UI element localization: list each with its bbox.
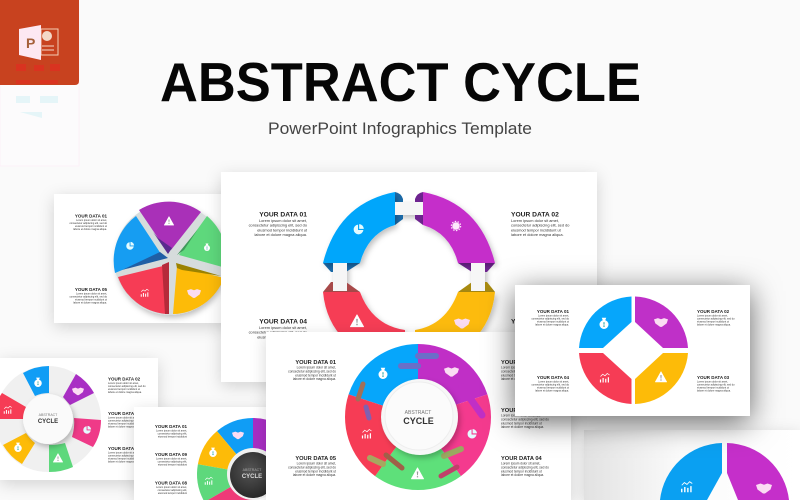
- text: data 02: [501, 360, 549, 381]
- half ring chart: [660, 443, 789, 500]
- text: data 02: eiusmod tempor incididunt ut: [108, 388, 140, 391]
- text block: data 04: consectetur adipiscing elit, sed do: [249, 330, 307, 335]
- text: data 02: labore et dolore magna aliqua.: [697, 324, 731, 326]
- text: data 03: eiusmod tempor incididunt ut: [697, 386, 729, 390]
- PowerPoint badge: [0, 0, 79, 166]
- text: data 01: eiusmod tempor incididunt ut: [295, 373, 336, 377]
- text: data 01: labore et dolore magna aliqua.: [535, 324, 569, 326]
- text: data 02: Lorem ipsum dolor sit amet,: [697, 314, 728, 318]
- panel: pie slide: [54, 194, 234, 323]
- text: data 01: YOUR DATA 01: [537, 309, 569, 314]
- text block: data 05: eiusmod tempor incididunt ut: [75, 298, 107, 302]
- icon: chart: [4, 406, 12, 414]
- center label: [38, 413, 58, 425]
- text: data 01: eiusmod tempor incididunt ut: [537, 320, 569, 324]
- text block: data 02: labore et dolore magna aliqua.: [511, 232, 564, 237]
- panel: center donut slide: [266, 332, 571, 500]
- text block: data 01: YOUR DATA 01: [75, 214, 107, 218]
- text block: data 01: YOUR DATA 01: [259, 212, 307, 218]
- text: data 02: Lorem ipsum dolor sit amet,: [501, 366, 540, 370]
- text block: data 05: YOUR DATA 05: [75, 287, 107, 292]
- panel: dark center slide: [134, 407, 301, 500]
- icon: money bag: [378, 368, 388, 379]
- text: data 01: [155, 424, 187, 438]
- text: data 09: Lorem ipsum dolor sit amet,: [156, 458, 187, 460]
- text: data 08: [155, 480, 187, 495]
- text block: data 04: Lorem ipsum dolor sit amet,: [259, 325, 307, 330]
- text block: data 02: YOUR DATA 02: [511, 212, 559, 218]
- icon: warning: [655, 372, 667, 382]
- text: data 03: Lorem ipsum dolor sit amet,: [697, 380, 728, 384]
- text block: data 01: labore et dolore magna aliqua.: [254, 232, 307, 237]
- text: data 04: [501, 456, 549, 477]
- text: data 04: YOUR DATA 04: [501, 456, 542, 462]
- center label: ABSTRACT: [405, 410, 431, 416]
- text: data 04: eiusmod tempor incididunt ut: [537, 386, 569, 390]
- icon: clock: [126, 242, 134, 250]
- text block: data 02: eiusmod tempor incididunt ut: [511, 227, 562, 232]
- text: data 09: [155, 452, 187, 466]
- text: data 04: consectetur adipiscing elit, sed do: [531, 384, 570, 386]
- pie chart: [114, 202, 227, 315]
- text: data 09: eiusmod tempor incididunt: [158, 464, 187, 466]
- center label: CYCLE: [38, 419, 58, 425]
- icon: clock: [468, 429, 477, 438]
- icon: handshake: [187, 289, 201, 298]
- icon: person: [209, 448, 217, 457]
- icon: clock: [354, 224, 364, 234]
- icon: handshake: [756, 484, 772, 494]
- text block: data 01: eiusmod tempor incididunt ut: [75, 225, 107, 228]
- text: data 05: eiusmod tempor incididunt ut: [295, 469, 336, 473]
- text: data 04: labore et dolore magna aliqua.: [108, 460, 142, 464]
- text block: data 01: eiusmod tempor incididunt ut: [257, 227, 308, 232]
- text block: data 05: [69, 287, 108, 304]
- text: data 03: Lorem ipsum dolor sit amet,: [108, 416, 139, 420]
- text: data 01: YOUR DATA 01: [295, 360, 336, 366]
- center label: CYCLE: [242, 474, 262, 480]
- text: data 09: consectetur adipiscing elit,: [158, 460, 187, 464]
- text: data 03: labore et dolore magna aliqua.: [108, 426, 142, 428]
- dark wheel chart: [197, 418, 301, 500]
- text: data 01: consectetur adipiscing elit, sed do: [288, 369, 336, 373]
- text: data 03: [501, 408, 549, 429]
- text: data 05: consectetur adipiscing elit, sed do: [288, 465, 336, 469]
- text: data 04: [108, 446, 146, 464]
- center label: CYCLE: [403, 416, 434, 426]
- text: data 08: Lorem ipsum dolor sit amet,: [156, 486, 187, 489]
- text: data 03: eiusmod tempor incididunt ut: [108, 422, 140, 426]
- text: data 01: Lorem ipsum dolor sit amet,: [156, 430, 187, 432]
- text: data 03: labore et dolore magna aliqua.: [501, 425, 544, 429]
- text block: data 01: consectetur adipiscing elit, sed do: [69, 222, 108, 225]
- text: data 03: consectetur adipiscing elit, sed do: [697, 384, 735, 386]
- panel: two-tone slide: [584, 430, 800, 500]
- text block: data 04: YOUR DATA 04: [259, 318, 307, 326]
- icon: chart: [362, 430, 372, 438]
- icon: warning: [411, 468, 424, 479]
- panel: ring slide: [221, 172, 597, 382]
- text: data 01: Lorem ipsum dolor sit amet,: [538, 314, 569, 318]
- text: data 02: YOUR DATA 02: [697, 309, 730, 314]
- text: data 01: Lorem ipsum dolor sit amet,: [297, 366, 336, 370]
- icon: chart: [600, 374, 610, 382]
- icon: person: [14, 443, 22, 452]
- text: data 04: Lorem ipsum dolor sit amet,: [538, 380, 569, 384]
- icon: handshake: [72, 388, 84, 395]
- text: data 03: [108, 411, 146, 428]
- text: data 02: eiusmod tempor incididunt ut: [697, 320, 729, 324]
- text: data 04: consectetur adipiscing elit, sed do: [108, 454, 146, 458]
- text: data 02: eiusmod tempor incididunt ut: [501, 373, 542, 377]
- text: data 02: labore et dolore magna aliqua.: [501, 377, 544, 381]
- subtitle: PowerPoint Infographics Template: [268, 119, 532, 138]
- panel: diamond ring slide: [515, 285, 750, 416]
- center label: ABSTRACT: [243, 468, 262, 472]
- text: data 04: labore et dolore magna aliqua.: [535, 390, 569, 392]
- text: data 04: YOUR DATA 04: [537, 375, 569, 380]
- text block: data 01: [249, 212, 308, 237]
- text: data 05: [288, 456, 336, 477]
- icon: handshake: [232, 432, 244, 439]
- text block: data 03: YOUR DATA 03: [511, 318, 559, 326]
- icon: money bag: [34, 378, 42, 387]
- text: data 02: Lorem ipsum dolor sit amet,: [108, 382, 139, 385]
- text: data 04: Lorem ipsum dolor sit amet,: [501, 462, 540, 466]
- icon: handshake: [654, 318, 668, 327]
- icon: chart: [682, 482, 692, 492]
- text: data 02: YOUR DATA 02: [108, 376, 141, 382]
- text: data 05: Lorem ipsum dolor sit amet,: [297, 462, 336, 466]
- panel: wheel slide: [0, 358, 158, 480]
- text: data 01: [288, 360, 336, 381]
- text: data 03: consectetur adipiscing elit, sed do: [501, 417, 549, 421]
- ring chart: [323, 192, 495, 340]
- icon: money bag: [600, 318, 608, 329]
- text block: data 01: Lorem ipsum dolor sit amet,: [76, 219, 107, 222]
- text: data 04: Lorem ipsum dolor sit amet,: [108, 452, 139, 454]
- text: data 02: [108, 376, 146, 394]
- text: data 03: eiusmod tempor incididunt ut: [501, 421, 542, 425]
- text: data 03: consectetur adipiscing elit, sed do: [108, 420, 146, 422]
- icon: handshake: [454, 318, 470, 328]
- text: data 04: consectetur adipiscing elit, sed do: [501, 465, 549, 469]
- text: data 04: YOUR DATA 04: [108, 446, 141, 451]
- text block: data 04: [249, 318, 308, 339]
- text: data 02: consectetur adipiscing elit, sed do: [501, 369, 549, 373]
- text block: data 02: [511, 212, 569, 237]
- text: data 04: [531, 375, 570, 392]
- text: data 08: YOUR DATA 08: [155, 480, 187, 486]
- text: data 03: [697, 375, 735, 392]
- text: data 03: YOUR DATA 03: [108, 411, 141, 416]
- text: data 02: labore et dolore magna aliqua.: [108, 391, 142, 394]
- text block: data 05: consectetur adipiscing elit, sed do: [69, 296, 108, 298]
- text: data 03: YOUR DATA 03: [501, 408, 542, 414]
- text block: data 01: consectetur adipiscing elit, sed do: [249, 223, 307, 228]
- PowerPoint badge: P: [26, 35, 35, 51]
- icon: money bag: [204, 244, 210, 251]
- text: data 01: [531, 309, 570, 326]
- center label: [403, 410, 434, 426]
- text: data 03: Lorem ipsum dolor sit amet,: [501, 414, 540, 418]
- text: data 05: labore et dolore magna aliqua.: [293, 473, 336, 477]
- text: data 01: YOUR DATA 01: [155, 424, 187, 429]
- donut chart: [345, 344, 491, 490]
- icon: handshake: [444, 367, 459, 377]
- text: data 01: consectetur adipiscing elit,: [158, 432, 187, 436]
- text: data 08: eiusmod tempor incididunt: [158, 492, 187, 495]
- title: ABSTRACT CYCLE: [160, 51, 641, 113]
- text block: data 05: Lorem ipsum dolor sit amet,: [76, 292, 107, 296]
- text block: data 04: eiusmod tempor incididunt ut: [257, 334, 308, 339]
- icon: chart: [205, 477, 213, 485]
- text: data 04: eiusmod tempor incididunt ut: [108, 458, 140, 460]
- text: data 05: YOUR DATA 05: [295, 456, 336, 462]
- text block: data 01: [69, 214, 108, 231]
- icon: warning: [164, 217, 174, 225]
- icon: warning: [53, 454, 63, 462]
- text: data 02: [697, 309, 735, 326]
- text block: data 02: consectetur adipiscing elit, sed do: [511, 223, 569, 228]
- text: data 09: YOUR DATA 09: [155, 452, 187, 457]
- text: data 02: consectetur adipiscing elit, sed do: [697, 318, 735, 320]
- text: data 01: labore et dolore magna aliqua.: [293, 377, 336, 381]
- text block: data 01: Lorem ipsum dolor sit amet,: [259, 218, 307, 223]
- icon: clock: [83, 426, 91, 434]
- text: data 08: consectetur adipiscing elit,: [158, 489, 187, 492]
- icon: gear: [451, 221, 461, 231]
- center label: ABSTRACT: [39, 413, 58, 417]
- diamond ring chart: [579, 296, 688, 404]
- wheel chart: [0, 366, 101, 472]
- text: data 01: consectetur adipiscing elit, sed do: [531, 318, 570, 320]
- text: data 02: YOUR DATA 02: [501, 360, 542, 366]
- text block: data 01: labore et dolore magna aliqua.: [73, 228, 107, 231]
- text: data 03: labore et dolore magna aliqua.: [697, 390, 731, 392]
- text: data 02: consectetur adipiscing elit, sed do: [108, 385, 146, 388]
- text: data 03: YOUR DATA 03: [697, 375, 730, 380]
- text block: data 05: labore et dolore magna aliqua.: [73, 302, 107, 304]
- text: data 04: labore et dolore magna aliqua.: [501, 473, 544, 477]
- text block: data 02: Lorem ipsum dolor sit amet,: [511, 218, 559, 223]
- text: data 04: eiusmod tempor incididunt ut: [501, 469, 542, 473]
- text: data 01: eiusmod tempor incididunt: [158, 436, 187, 438]
- center label: [242, 468, 262, 480]
- icon: warning: [350, 315, 364, 327]
- icon: chart: [141, 289, 149, 297]
